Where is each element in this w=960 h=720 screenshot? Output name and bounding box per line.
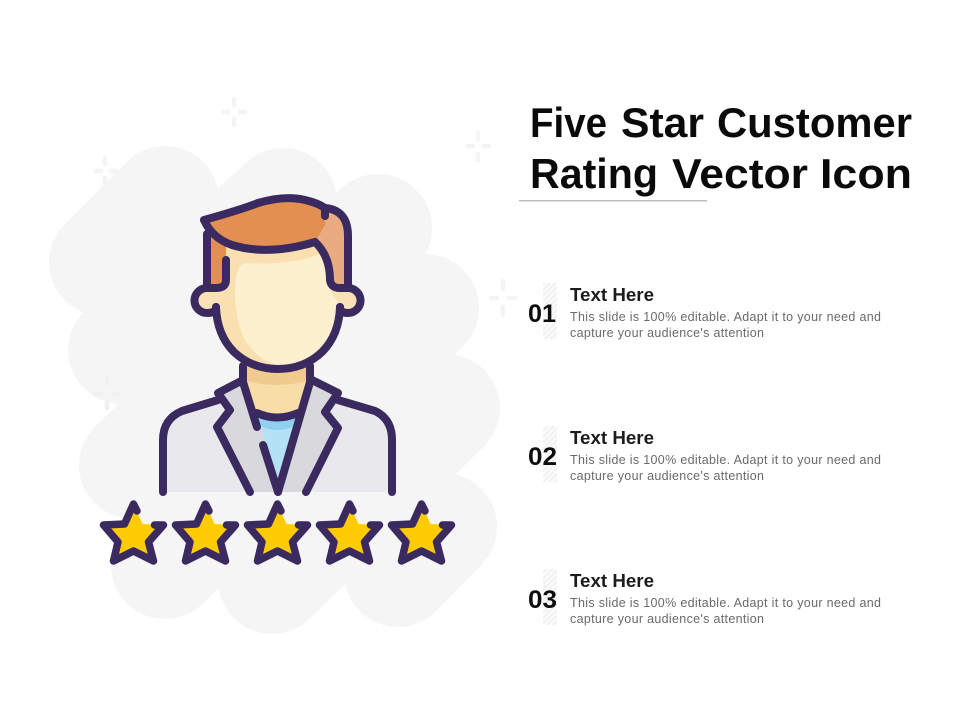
item 03: Text Here bbox=[570, 571, 654, 591]
title: Icon bbox=[820, 150, 912, 197]
item 03: capture your audience's attention bbox=[570, 612, 764, 626]
face highlight bbox=[235, 254, 340, 366]
item 02: This slide is 100% editable. Adapt it to your need and bbox=[570, 453, 881, 467]
background blobs bbox=[103, 200, 446, 580]
item 03: 03 bbox=[528, 586, 557, 614]
item 02: Text Here bbox=[570, 428, 654, 448]
item 01: 01 bbox=[528, 300, 556, 328]
item 01: capture your audience's attention bbox=[570, 326, 764, 340]
shirt bbox=[258, 417, 298, 482]
title underline bbox=[519, 200, 707, 202]
star 4 bbox=[320, 504, 380, 561]
face base bbox=[216, 242, 340, 370]
lapels bbox=[217, 380, 338, 492]
title: Rating bbox=[530, 150, 658, 197]
title: Customer bbox=[717, 99, 912, 146]
item 01: This slide is 100% editable. Adapt it to your need and bbox=[570, 310, 881, 324]
person outline bbox=[163, 198, 392, 492]
item 02: capture your audience's attention bbox=[570, 469, 764, 483]
star 5 bbox=[392, 504, 452, 561]
icon: customer person bbox=[163, 198, 392, 492]
item 02: 02 bbox=[528, 443, 557, 471]
item 01: Text Here bbox=[570, 285, 654, 305]
star 2 bbox=[176, 504, 236, 561]
title: Star bbox=[621, 99, 704, 146]
back hair bbox=[207, 207, 348, 288]
star 1 bbox=[104, 504, 164, 561]
five star rating bbox=[104, 504, 452, 561]
item 03: This slide is 100% editable. Adapt it to your need and bbox=[570, 596, 881, 610]
title: Vector bbox=[672, 150, 808, 197]
item 01 bbox=[528, 283, 881, 340]
ears bbox=[194, 288, 225, 313]
decorative sparkles bbox=[95, 99, 515, 408]
title bbox=[530, 99, 912, 197]
item 03 bbox=[528, 569, 881, 626]
neck bbox=[243, 365, 310, 421]
star 3 bbox=[248, 504, 308, 561]
title: Five bbox=[530, 99, 607, 146]
fringe bbox=[204, 198, 325, 249]
jacket bbox=[163, 380, 392, 492]
item 02 bbox=[528, 426, 881, 483]
